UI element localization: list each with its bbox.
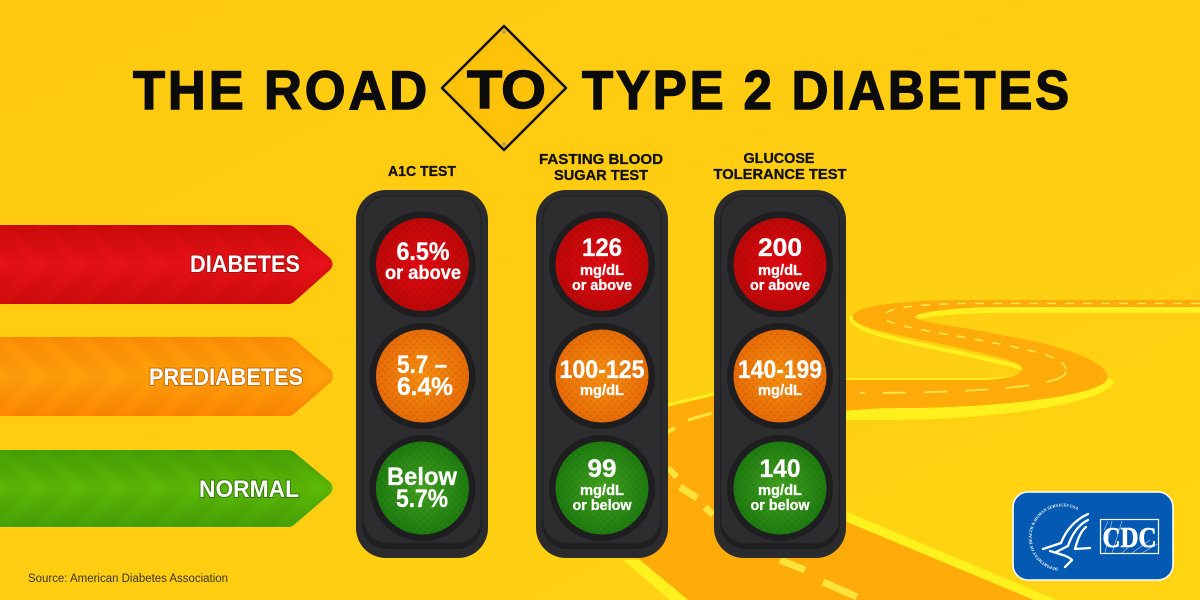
green light: 99 mg/dL or below: [549, 435, 655, 541]
green light: below 5.7%: Below: [387, 463, 458, 491]
orange light: 100-125 mg/dL: [549, 323, 655, 429]
heading: glucose tolerance test: GLUCOSE: [744, 151, 815, 167]
CDC and HHS logo: [1012, 491, 1174, 581]
green light: 99 mg/dL or below: mg/dL: [580, 482, 624, 499]
green light: 140 mg/dL or below: mg/dL: [758, 482, 802, 499]
orange light: 140-199 mg/dL: mg/dL: [758, 382, 802, 399]
orange light: 5.7 – 6.4%: 6.4%: [397, 373, 453, 401]
red light: 6.5% or above: [370, 212, 476, 318]
orange light: 100-125 mg/dL: 100-125: [560, 356, 645, 384]
HHS seal: DEPARTMENT OF HEALTH & HUMAN SERVICES USA: [1028, 504, 1078, 571]
traffic light: fasting blood sugar test: [536, 190, 668, 558]
green light: 140 mg/dL or below: 140: [760, 455, 800, 483]
red light: 200 mg/dL or above: or above: [750, 277, 810, 294]
red light: 200 mg/dL or above: mg/dL: [758, 262, 802, 279]
title: TYPE 2 DIABETES: [582, 59, 1072, 121]
traffic light: A1C test: [356, 190, 488, 558]
title: THE ROAD: [133, 59, 430, 121]
orange light: 140-199 mg/dL: [727, 323, 833, 429]
road sign diamond with TO: [442, 26, 566, 150]
heading: fasting blood sugar test: [539, 152, 663, 184]
orange light: 100-125 mg/dL: mg/dL: [580, 382, 624, 399]
road sign diamond with TO: TO: [467, 60, 546, 120]
CDC box: CDC: [1102, 523, 1156, 554]
arrow: normal: NORMAL: [199, 476, 299, 503]
winding road illustration: [598, 300, 1200, 600]
red light: 126 mg/dL or above: 126: [582, 234, 622, 262]
green light: 140 mg/dL or below: [727, 435, 833, 541]
heading: fasting blood sugar test: FASTING BLOOD: [539, 152, 663, 168]
heading: A1C test: A1C TEST: [388, 164, 456, 180]
green light: below 5.7%: [370, 435, 476, 541]
red light: 126 mg/dL or above: or above: [572, 277, 632, 294]
arrow: prediabetes: PREDIABETES: [149, 364, 303, 391]
red light: 126 mg/dL or above: [549, 212, 655, 318]
heading: glucose tolerance test: [714, 151, 847, 183]
arrow: diabetes: DIABETES: [190, 251, 300, 278]
red light: 200 mg/dL or above: 200: [758, 234, 802, 262]
traffic light: glucose tolerance test: [714, 190, 846, 558]
heading: fasting blood sugar test: SUGAR TEST: [554, 168, 648, 184]
red light: 126 mg/dL or above: mg/dL: [580, 262, 624, 279]
red light: 200 mg/dL or above: [727, 212, 833, 318]
green light: below 5.7%: 5.7%: [396, 485, 448, 513]
source note: Source: American Diabetes Association: [28, 573, 228, 585]
green light: 140 mg/dL or below: or below: [750, 497, 810, 514]
arrow: prediabetes: [0, 337, 333, 416]
orange light: 5.7 – 6.4%: 5.7 –: [397, 351, 447, 379]
red light: 6.5% or above: 6.5%: [396, 238, 450, 266]
red light: 6.5% or above: or above: [385, 263, 461, 284]
orange light: 5.7 – 6.4%: [370, 323, 476, 429]
heading: glucose tolerance test: TOLERANCE TEST: [714, 167, 847, 183]
arrow: diabetes: [0, 225, 332, 304]
title: [133, 26, 1072, 150]
green light: 99 mg/dL or below: or below: [572, 497, 632, 514]
green light: 99 mg/dL or below: 99: [588, 455, 616, 483]
arrow: normal: [0, 450, 332, 527]
orange light: 140-199 mg/dL: 140-199: [738, 356, 822, 384]
